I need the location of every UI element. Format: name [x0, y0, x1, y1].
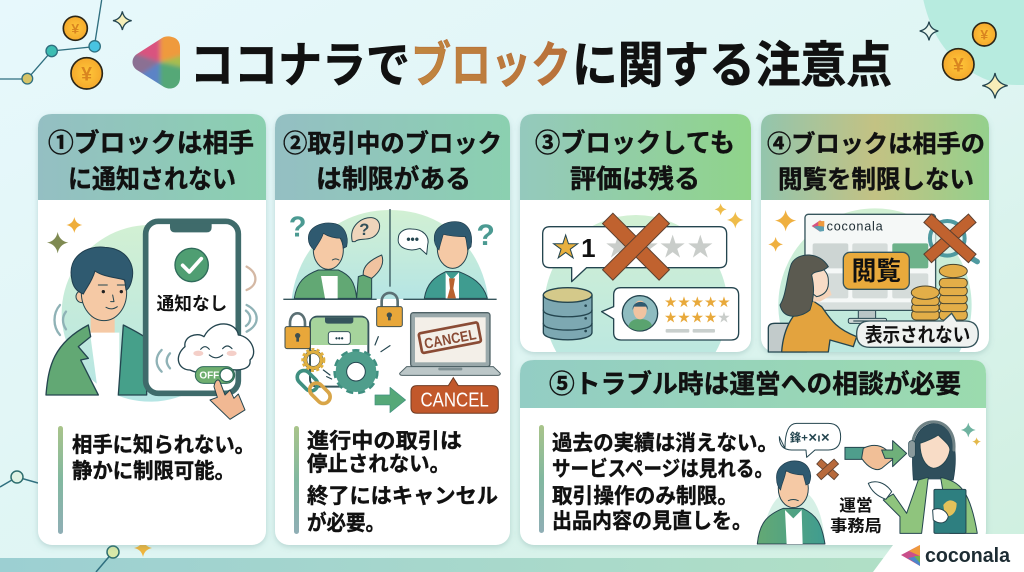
panel 2 body text: が必要。: [307, 511, 385, 535]
panel 2 header: ②取引中のブロック: [283, 129, 502, 158]
logo mark small: [901, 545, 920, 566]
panel 1 header: に通知されない: [68, 164, 236, 194]
illustration: woman at monitor: 閲覧: [852, 256, 901, 286]
panel 1 body text: 相手に知られない。: [72, 434, 255, 457]
illustration: two people, lock, gears, cancel: CANCEL: [420, 390, 489, 412]
panel 4 header: ④ブロックは相手の: [767, 130, 985, 158]
top-right decoration: coins and sparkles: ¥: [953, 55, 964, 76]
top-right decoration: coins and sparkles: ¥: [980, 27, 988, 43]
title: ココナラで: [190, 39, 410, 93]
title: ブロック: [411, 39, 571, 93]
bottom-left decoration: nodes: [0, 471, 152, 572]
illustration: man, phone and cloud: 通知なし: [157, 294, 227, 314]
illustration: user, handshake, operator: 事務局: [830, 517, 882, 536]
panel 4 header: 閲覧を制限しない: [778, 166, 974, 194]
illustration: two people, lock, gears, cancel: ?: [289, 212, 306, 244]
top-left decoration: growth line and coins: ¥: [71, 21, 79, 37]
panel 2 body text: 停止されない。: [307, 453, 450, 476]
illustration: two people, lock, gears, cancel: CANCEL: [423, 327, 478, 353]
panel 2 header: は制限がある: [316, 164, 471, 194]
title: に関する注意点: [572, 39, 892, 93]
panel 2 body text: [294, 426, 498, 535]
bottom-right logo tab: [873, 534, 1024, 572]
illustration: woman at monitor: [768, 208, 980, 353]
illustration: stars, database, review: 1: [581, 233, 596, 263]
panel 2 body text: 終了にはキャンセル: [307, 485, 498, 508]
illustration: man, phone and cloud: [46, 217, 257, 419]
panel 5 body text: サービスページは見れる。: [552, 458, 773, 481]
panel 2 header: [275, 114, 510, 200]
panel 1 header: ①ブロックは相手: [48, 128, 254, 158]
bottom-right logo tab: coconala: [925, 545, 1011, 567]
panel 1: not notified: [38, 114, 266, 545]
panel 3 header: 評価は残る: [570, 164, 700, 194]
illustration: user, handshake, operator: [757, 422, 981, 544]
illustration: two people, lock, gears, cancel: •••: [335, 334, 344, 343]
illustration: stars, database, review: [542, 204, 744, 352]
panel 5 body text: [539, 425, 778, 533]
panel 1 body text: 静かに制限可能。: [72, 460, 235, 483]
illustration: two people, lock, gears, cancel: ?: [476, 219, 495, 252]
panel 3 header: [520, 114, 751, 200]
panel 5 body text: 取引操作のみ制限。: [552, 485, 738, 508]
illustration: two people, lock, gears, cancel: ?: [359, 220, 369, 239]
title: [190, 39, 892, 93]
top-left decoration: growth line and coins: [0, 0, 132, 89]
panel 5 body text: 過去の実績は消えない。: [552, 432, 778, 455]
top-right decoration: coins and sparkles: [920, 0, 1024, 98]
panel 4: browsing not restricted: [758, 114, 991, 356]
illustration: user, handshake, operator: 鋒+✕ı✕: [790, 430, 830, 444]
illustration: two people, lock, gears, cancel: •••: [406, 233, 419, 247]
panel 5 header: [520, 360, 986, 408]
illustration: two people, lock, gears, cancel: [283, 209, 500, 413]
illustration: woman at monitor: coconala: [827, 219, 884, 233]
illustration: user, handshake, operator: 運営: [839, 496, 873, 515]
illustration: man, phone and cloud: OFF: [199, 371, 219, 382]
panel 5 body text: 出品内容の見直しを。: [552, 510, 752, 533]
panel 1 body text: [58, 426, 255, 534]
logo: coconala mark: [132, 36, 180, 88]
panel 5: contact support: [520, 360, 986, 545]
top-left decoration: growth line and coins: ¥: [81, 64, 92, 85]
panel 3 header: ③ブロックしても: [535, 128, 735, 158]
panel 1 header: [38, 114, 266, 200]
panel 2: ongoing deals: [275, 114, 510, 545]
panel 4 header: [761, 114, 989, 200]
bottom band: [0, 558, 1024, 572]
illustration: woman at monitor: 表示されない: [865, 323, 970, 346]
panel 3: ratings remain: [518, 114, 754, 356]
panel 5 header: ⑤トラブル時は運営への相談が必要: [549, 369, 961, 399]
panel 2 body text: 進行中の取引は: [307, 430, 462, 453]
